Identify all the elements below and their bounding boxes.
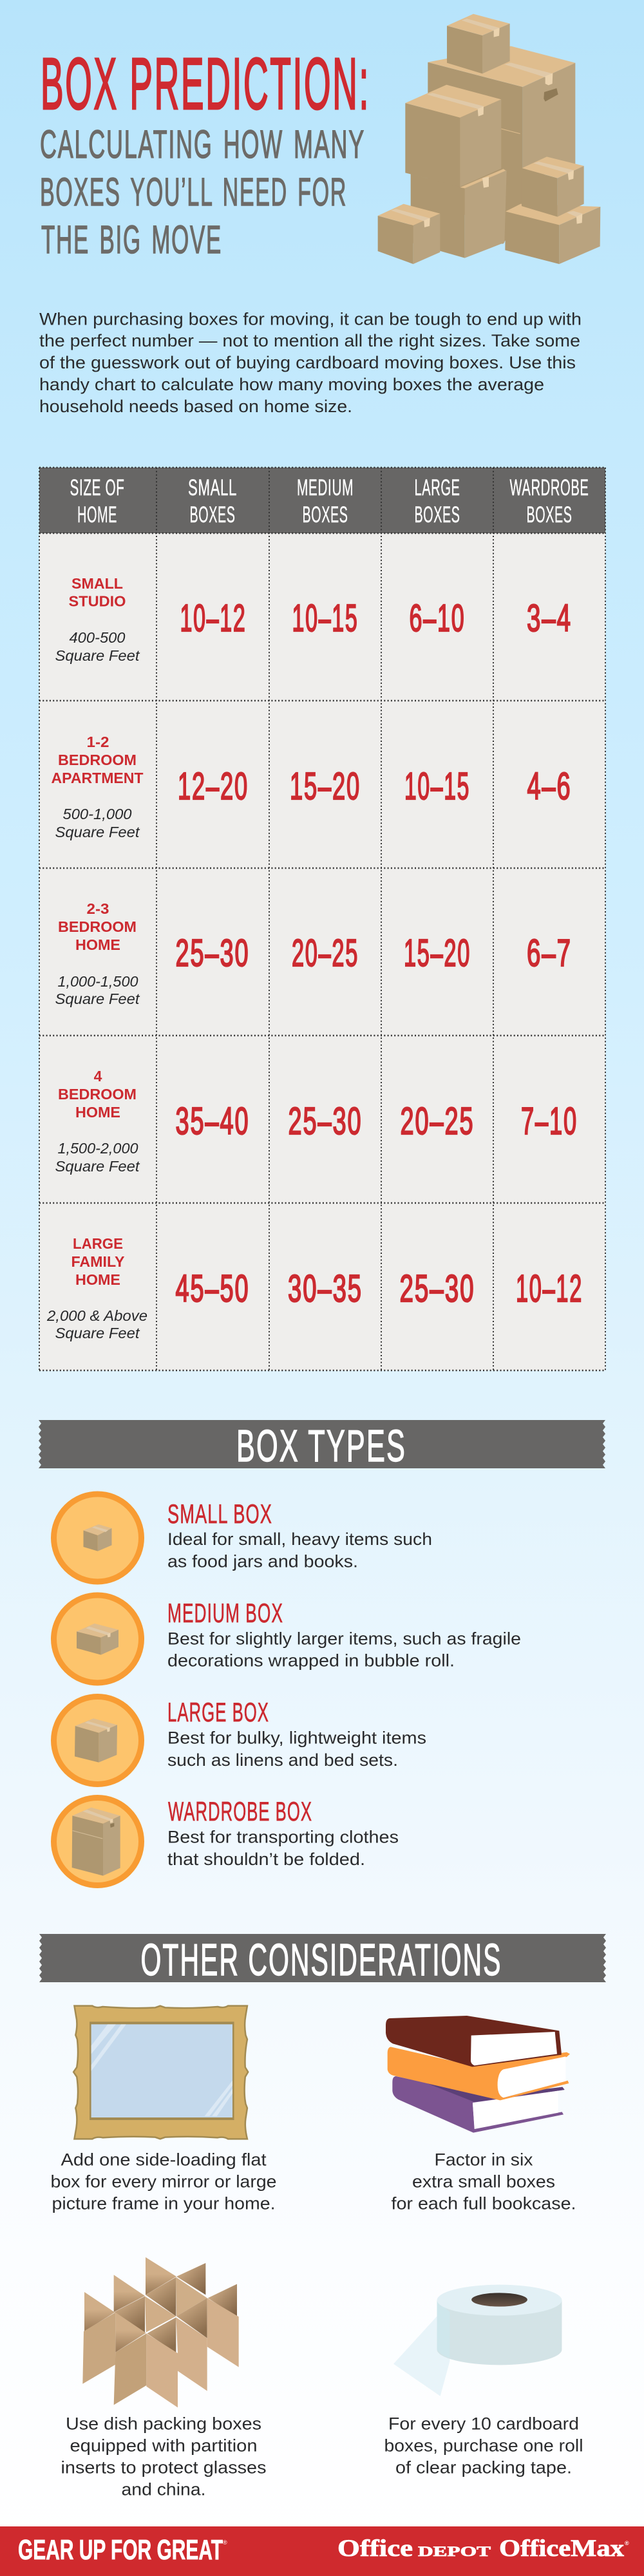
table header row: MEDIUM [297, 475, 354, 500]
panel: large box: such as linens and bed sets. [167, 1750, 398, 1770]
row: small studio: 3–4 [527, 597, 572, 639]
row: large family home: LARGE [73, 1235, 123, 1252]
row: 2-3 bedroom home: 25–30 [175, 932, 250, 974]
panel: small box [54, 1494, 432, 1582]
row: 2-3 bedroom home: 15–20 [404, 932, 471, 974]
tip text [50, 2150, 277, 2213]
table header row: BOXES [527, 502, 572, 527]
row: 2-3 bedroom home: 6–7 [527, 932, 572, 974]
panel: large box [54, 1696, 426, 1784]
icon: roll of clear tape [393, 2285, 562, 2396]
panel: wardrobe box: that shouldn’t be folded. [167, 1850, 365, 1869]
icon: medium box [54, 1595, 142, 1683]
panel: medium box: Best for slightly larger items, such as fragile [167, 1629, 521, 1649]
panel: wardrobe box: WARDROBE BOX [168, 1796, 312, 1826]
illustration: stacked moving boxes [378, 14, 600, 264]
subtitle: THE BIG MOVE [41, 218, 222, 261]
footer [0, 2526, 644, 2576]
row: 4 bedroom home [55, 1068, 578, 1175]
row: large family home: 10–12 [516, 1267, 583, 1310]
intro paragraph [39, 309, 582, 416]
row: 2-3 bedroom home [55, 900, 572, 1007]
row: large family home: 25–30 [399, 1267, 475, 1310]
title block [40, 43, 370, 261]
tip text: for each full bookcase. [392, 2193, 576, 2213]
subtitle: BOXES YOU’LL NEED FOR [40, 170, 347, 214]
icon: stack of books [386, 2016, 570, 2133]
table header row: HOME [77, 502, 117, 527]
tip text [61, 2414, 267, 2499]
tip: dish partition [61, 2257, 267, 2499]
logo: office depot officemax: OfficeMax [499, 2535, 625, 2562]
tip text: Factor in six [434, 2150, 533, 2169]
row: 1-2 bedroom apartment: 12–20 [178, 765, 249, 808]
tip text [392, 2150, 576, 2213]
tip: packing tape [384, 2285, 583, 2477]
tip text: equipped with partition [70, 2436, 258, 2455]
row: large family home: 30–35 [288, 1267, 363, 1310]
icon: framed mirror [73, 2006, 248, 2139]
row: 1-2 bedroom apartment [52, 734, 572, 840]
panel: large box: LARGE BOX [167, 1697, 269, 1727]
row: large family home: Square Feet [55, 1325, 140, 1341]
row: 2-3 bedroom home: 20–25 [292, 932, 359, 974]
row: 1-2 bedroom apartment: APARTMENT [52, 770, 143, 786]
row: small studio: 10–12 [180, 597, 246, 639]
row: small studio: STUDIO [68, 592, 126, 609]
slogan: ® [223, 2539, 227, 2546]
intro paragraph: handy chart to calculate how many moving boxes the average [39, 375, 544, 394]
row: large family home: HOME [75, 1271, 120, 1288]
row: large family home [46, 1235, 583, 1341]
row: small studio: 400-500 [70, 629, 125, 646]
table header row: SIZE OF [70, 475, 125, 500]
table header row: LARGE [415, 475, 460, 500]
logo: office depot officemax [337, 2535, 629, 2562]
tip text: of clear packing tape. [395, 2458, 572, 2477]
row: 2-3 bedroom home: Square Feet [55, 990, 140, 1007]
row: 1-2 bedroom apartment: 4–6 [527, 765, 572, 808]
row: small studio: 6–10 [410, 597, 465, 639]
tip text: Use dish packing boxes [66, 2414, 261, 2433]
logo: office depot officemax: DEPOT [418, 2543, 491, 2559]
icon: large box [54, 1696, 142, 1784]
row: 2-3 bedroom home: 2-3 [86, 900, 109, 917]
slogan [18, 2534, 227, 2566]
table header row: SMALL [188, 475, 237, 500]
tip text: boxes, purchase one roll [384, 2436, 583, 2455]
panel: small box: SMALL BOX [167, 1499, 272, 1529]
tip: mirror [50, 2006, 277, 2213]
panel: medium box [54, 1595, 521, 1683]
row: 4 bedroom home: BEDROOM [58, 1086, 137, 1103]
table header row [39, 468, 605, 533]
tip text: extra small boxes [412, 2172, 555, 2191]
intro paragraph: When purchasing boxes for moving, it can be tough to end up with [39, 309, 582, 328]
panel: large box: Best for bulky, lightweight items [167, 1728, 426, 1748]
table header row: WARDROBE [510, 475, 589, 500]
row: 4 bedroom home: Square Feet [55, 1158, 140, 1175]
row: 1-2 bedroom apartment: 500-1,000 [63, 806, 131, 822]
row: 4 bedroom home: 7–10 [521, 1100, 578, 1142]
banner: box types: BOX TYPES [236, 1421, 406, 1471]
panel: medium box: decorations wrapped in bubble roll. [167, 1651, 455, 1671]
table header row: BOXES [303, 502, 348, 527]
intro paragraph: household needs based on home size. [39, 397, 352, 416]
table header row: BOXES [415, 502, 460, 527]
row: 1-2 bedroom apartment: BEDROOM [58, 752, 137, 768]
icon: small box [54, 1494, 142, 1582]
tip text: box for every mirror or large [50, 2172, 277, 2191]
icon: wardrobe box [54, 1798, 142, 1886]
panel: wardrobe box: Best for transporting clothes [167, 1828, 399, 1847]
tip text: and china. [121, 2479, 206, 2499]
row: 1-2 bedroom apartment: 1-2 [86, 734, 109, 750]
subtitle [40, 122, 365, 261]
row: 4 bedroom home: 20–25 [401, 1100, 474, 1142]
row: small studio: SMALL [71, 575, 123, 592]
row: 1-2 bedroom apartment: Square Feet [55, 824, 140, 840]
row: 4 bedroom home: 25–30 [289, 1100, 362, 1142]
table header row: BOXES [189, 502, 236, 527]
tip text: For every 10 cardboard [388, 2414, 579, 2433]
row: small studio [55, 575, 572, 664]
tip: books [386, 2016, 576, 2213]
tip text: inserts to protect glasses [61, 2458, 267, 2477]
logo: office depot officemax: Office [337, 2535, 413, 2562]
subtitle: CALCULATING HOW MANY [40, 122, 365, 166]
panel: small box: Ideal for small, heavy items such [167, 1530, 432, 1549]
row: 4 bedroom home: 4 [94, 1068, 102, 1084]
panel: wardrobe box [54, 1796, 399, 1886]
row: 2-3 bedroom home: HOME [75, 936, 120, 953]
slogan: GEAR UP FOR GREAT [18, 2534, 223, 2566]
chart: boxes needed by home size [39, 468, 605, 1370]
row: large family home: FAMILY [71, 1253, 125, 1270]
row: large family home: 2,000 & Above [46, 1307, 147, 1324]
row: small studio: 10–15 [292, 597, 358, 639]
tip text [384, 2414, 583, 2477]
row: 1-2 bedroom apartment: 10–15 [404, 765, 470, 808]
intro paragraph: of the guesswork out of buying cardboard moving boxes. Use this [39, 353, 576, 372]
row: 4 bedroom home: 1,500-2,000 [58, 1140, 138, 1157]
row: 2-3 bedroom home: 1,000-1,500 [58, 973, 138, 990]
banner: box types [39, 1420, 605, 1471]
panel: medium box: MEDIUM BOX [167, 1598, 283, 1628]
row: small studio: Square Feet [55, 647, 140, 664]
logo: office depot officemax: ® [625, 2540, 629, 2546]
intro paragraph: the perfect number — not to mention all the right sizes. Take some [39, 331, 580, 350]
row: 4 bedroom home: 35–40 [175, 1100, 250, 1142]
panel: small box: as food jars and books. [167, 1552, 358, 1571]
icon: cardboard partition insert [82, 2257, 239, 2407]
row: 2-3 bedroom home: BEDROOM [58, 918, 137, 935]
row: 1-2 bedroom apartment: 15–20 [290, 765, 361, 808]
row: large family home: 45–50 [175, 1267, 250, 1310]
row: 4 bedroom home: HOME [75, 1104, 120, 1121]
tip text: picture frame in your home. [52, 2193, 276, 2213]
tip text: Add one side-loading flat [61, 2150, 267, 2169]
